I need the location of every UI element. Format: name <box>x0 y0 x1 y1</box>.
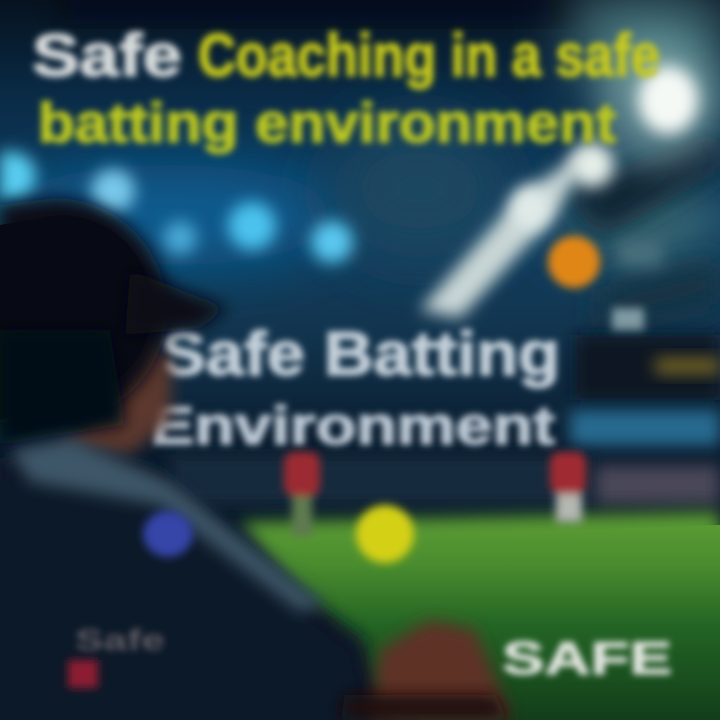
coach silhouette <box>0 198 380 720</box>
title <box>32 22 660 154</box>
central overlay heading: Environment <box>150 396 555 456</box>
central overlay heading <box>150 320 560 456</box>
orange ball <box>548 236 600 288</box>
yellow ball <box>356 505 414 563</box>
stadium stands <box>170 335 720 505</box>
small grey mark <box>612 308 644 330</box>
small grey label near ball <box>618 240 662 266</box>
central overlay heading: Safe Batting <box>160 320 560 389</box>
blue stadium lights <box>0 152 353 263</box>
floodlight beam <box>420 43 720 318</box>
title: batting environment <box>38 91 616 154</box>
shirt logo text: Safe <box>75 624 165 657</box>
title: Coaching in a safe <box>198 22 660 89</box>
cricket field <box>240 512 720 720</box>
players on field <box>284 452 586 536</box>
title: Safe <box>32 22 182 89</box>
shirt logo red mark <box>68 660 98 688</box>
arm and hand <box>340 620 512 720</box>
bottom right label: SAFE <box>502 632 672 684</box>
